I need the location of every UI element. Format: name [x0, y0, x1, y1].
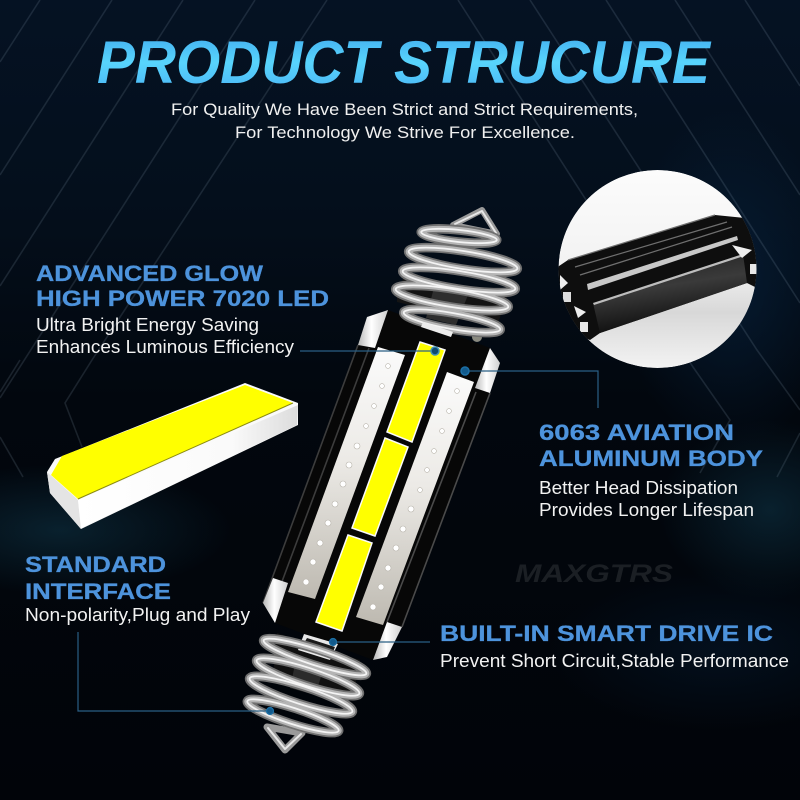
callout: drive IC leader: [330, 638, 430, 646]
heading: aluminum body: [539, 420, 763, 471]
text: drive IC description: Prevent Short Circuit,Stable Performance: [440, 651, 789, 671]
text: aluminum body description: Provides Longer Lifespan: [539, 500, 754, 520]
yellow LED chips: [316, 342, 445, 631]
bottom spring core: [273, 633, 360, 697]
subtitle: [171, 101, 638, 142]
heading: advanced glow: ADVANCED GLOW: [36, 261, 264, 286]
text: aluminum body description: Better Head Dissipation: [539, 478, 738, 498]
text: advanced glow description: Enhances Luminous Efficiency: [36, 337, 294, 357]
subtitle: For Quality We Have Been Strict and Strict Requirements,: [171, 101, 638, 119]
bottom spring coils: [245, 633, 369, 750]
silver strips: [288, 347, 405, 599]
icon: 7020 LED chip: [47, 383, 298, 529]
callout: standard interface leader: [78, 632, 274, 714]
strip holes: [303, 364, 459, 610]
heading: aluminum body: ALUMINUM BODY: [539, 446, 763, 471]
bulb: [245, 210, 519, 750]
text: advanced glow description: [36, 315, 294, 357]
chrome end caps: [358, 310, 388, 348]
title: PRODUCT STRUCURE: [97, 29, 712, 96]
heading: aluminum body: 6063 AVIATION: [539, 420, 734, 445]
heading: built-in smart drive IC: BUILT-IN SMART DRIVE IC: [440, 621, 773, 646]
heading: standard interface: STANDARD: [25, 552, 166, 577]
text: aluminum body description: [539, 478, 754, 520]
text: standard interface description: Non-polarity,Plug and Play: [25, 605, 250, 625]
heading: standard interface: INTERFACE: [25, 579, 171, 604]
inset: heat sink close-up: [550, 170, 765, 368]
top spring core: [397, 273, 507, 326]
text: advanced glow description: Ultra Bright Energy Saving: [36, 315, 259, 335]
watermark: MAXGTRS: [515, 560, 673, 588]
body: [263, 310, 500, 660]
subtitle: For Technology We Strive For Excellence.: [235, 124, 575, 142]
heading: standard interface: [25, 552, 171, 604]
heading: advanced glow: HIGH POWER 7020 LED: [36, 286, 329, 311]
callout: advanced glow leader: [300, 347, 439, 355]
top spring coils: [394, 210, 519, 337]
heading: advanced glow: [36, 261, 329, 311]
callout: aluminum body leader: [461, 367, 598, 408]
